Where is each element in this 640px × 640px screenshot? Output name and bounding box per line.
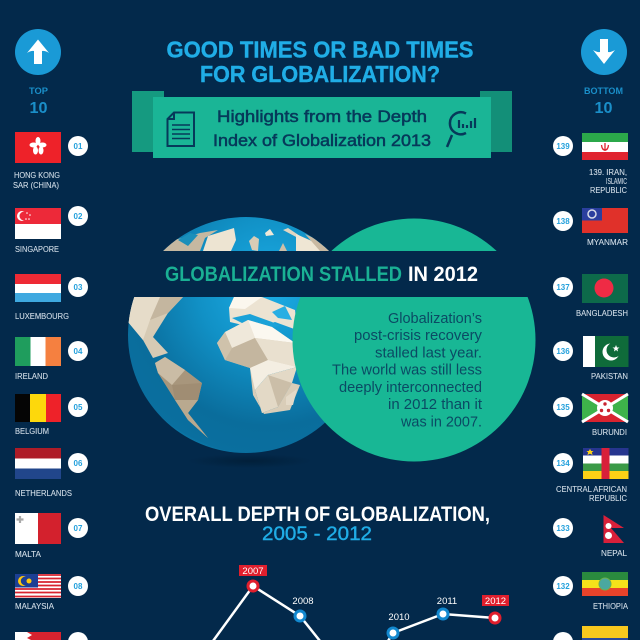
text block: stalled recovery: was in 2007.	[400, 414, 482, 430]
country: Ethiopia	[553, 572, 628, 611]
text block: stalled recovery	[332, 310, 483, 430]
country: Belgium: BELGIUM	[15, 426, 49, 436]
point 2012: 2012	[485, 596, 506, 607]
country: Belgium: 05	[74, 403, 83, 412]
banner text: Highlights from the Depth	[217, 107, 427, 126]
bottom 10 label: BOTTOM	[584, 86, 623, 97]
teal circle	[292, 218, 536, 462]
heading: overall depth	[145, 502, 490, 545]
band: section heading: IN 2012	[408, 263, 478, 286]
country: Iran: REPUBLIC	[590, 185, 627, 195]
country: Myanmar: MYANMAR	[587, 237, 628, 247]
line chart	[213, 565, 509, 640]
heading: overall depth: OVERALL DEPTH OF GLOBALIZATION,	[145, 502, 490, 526]
point 2007: 2007	[242, 566, 264, 577]
country: Bangladesh: BANGLADESH	[576, 308, 628, 318]
country: Singapore: 02	[74, 212, 83, 221]
country: Hong Kong: SAR (CHINA)	[13, 180, 59, 190]
country: Malaysia: 08	[74, 582, 83, 591]
country: Ireland: 04	[74, 347, 83, 356]
country: Iran: ISLAMIC	[606, 176, 627, 186]
country: Singapore: SINGAPORE	[15, 244, 59, 254]
country: Hong Kong	[13, 132, 88, 190]
country: Pakistan: 136	[556, 347, 570, 356]
top 10 label: TOP	[29, 86, 49, 97]
point 2010: 2010	[388, 612, 410, 623]
country: Malta: MALTA	[15, 549, 41, 559]
country: Pakistan	[553, 336, 628, 381]
text block: stalled recovery: The world was still less	[332, 362, 482, 378]
country: Ireland: IRELAND	[15, 371, 48, 381]
banner: highlights	[132, 91, 512, 158]
country: Bahrain	[15, 632, 88, 640]
country: Luxembourg: 03	[74, 283, 83, 292]
icon: document	[168, 112, 194, 146]
country: Singapore	[15, 206, 88, 254]
country: Burundi	[553, 394, 628, 437]
text block: stalled recovery: Globalization’s	[388, 310, 482, 327]
bottom 10 label: 10	[594, 100, 613, 117]
country: Central African Republic	[553, 448, 628, 503]
country: Malta	[15, 513, 88, 559]
icon: down arrow	[581, 29, 627, 75]
top 10 label: 10	[30, 100, 48, 117]
country: Malta: 07	[74, 524, 83, 533]
country: Central African Republic: REPUBLIC	[589, 493, 627, 503]
country: Hong Kong: HONG KONG	[14, 170, 60, 180]
country: Pakistan: PAKISTAN	[591, 371, 628, 381]
top 10 label	[29, 86, 49, 117]
country: Hong Kong: 01	[74, 142, 83, 151]
country: Nepal	[553, 515, 627, 558]
country: Burundi: 135	[556, 403, 570, 412]
banner text	[213, 107, 431, 150]
country: Ethiopia: ETHIOPIA	[593, 601, 628, 611]
text block: stalled recovery: deeply interconnected	[339, 379, 482, 396]
point 2008: 2008	[292, 596, 314, 607]
country: Bangladesh	[553, 274, 628, 318]
title: FOR GLOBALIZATION?	[200, 61, 440, 87]
point 2011	[437, 596, 457, 619]
text block: stalled recovery: stalled last year.	[375, 344, 482, 362]
country: Ethiopia: 132	[556, 582, 570, 591]
country: Myanmar	[553, 208, 628, 247]
country: Netherlands: NETHERLANDS	[15, 488, 72, 498]
country: Belgium	[15, 394, 88, 436]
point 2008	[292, 596, 314, 621]
country: Luxembourg: LUXEMBOURG	[15, 311, 69, 321]
country: Central African Republic: CENTRAL AFRICAN	[556, 484, 627, 494]
country: next bottom-ranked	[553, 626, 628, 640]
icon: magnifier chart	[447, 112, 475, 147]
country: Myanmar: 138	[556, 217, 570, 226]
country: Malaysia	[15, 574, 88, 611]
country: Central African Republic: 134	[556, 459, 570, 468]
country: Netherlands: 06	[74, 459, 83, 468]
text block: stalled recovery: post-crisis recovery	[354, 327, 482, 344]
icon: up arrow	[15, 29, 61, 75]
country: Iran: 139. IRAN,	[589, 167, 627, 177]
country: Nepal: NEPAL	[601, 548, 627, 558]
south america	[155, 357, 208, 438]
country: Bangladesh: 137	[556, 283, 570, 292]
country: Iran	[553, 133, 628, 195]
heading: overall depth: 2005 - 2012	[262, 523, 372, 545]
title	[166, 36, 474, 87]
country: Ireland	[15, 337, 88, 381]
title: GOOD TIMES OR BAD TIMES	[166, 36, 474, 62]
europe	[229, 297, 297, 330]
north america top	[158, 230, 218, 251]
band: section heading: GLOBALIZATION STALLED	[165, 263, 402, 286]
bottom 10 label	[584, 86, 623, 117]
globe	[128, 217, 329, 464]
text block: stalled recovery: in 2012 than it	[388, 396, 483, 413]
north america lower	[128, 297, 183, 358]
country: Nepal: 133	[556, 524, 570, 533]
country: Iran: 139	[556, 142, 570, 151]
africa	[217, 320, 300, 414]
country: Malaysia: MALAYSIA	[15, 601, 54, 611]
point 2011: 2011	[437, 596, 457, 607]
banner text: Index of Globalization 2013	[213, 131, 431, 150]
point 2012	[482, 595, 509, 623]
point 2007	[239, 565, 267, 591]
point 2010	[388, 612, 410, 638]
band: section heading	[130, 251, 530, 297]
country: Luxembourg	[15, 274, 88, 321]
country: Burundi: BURUNDI	[592, 427, 627, 437]
country: Netherlands	[15, 448, 88, 498]
